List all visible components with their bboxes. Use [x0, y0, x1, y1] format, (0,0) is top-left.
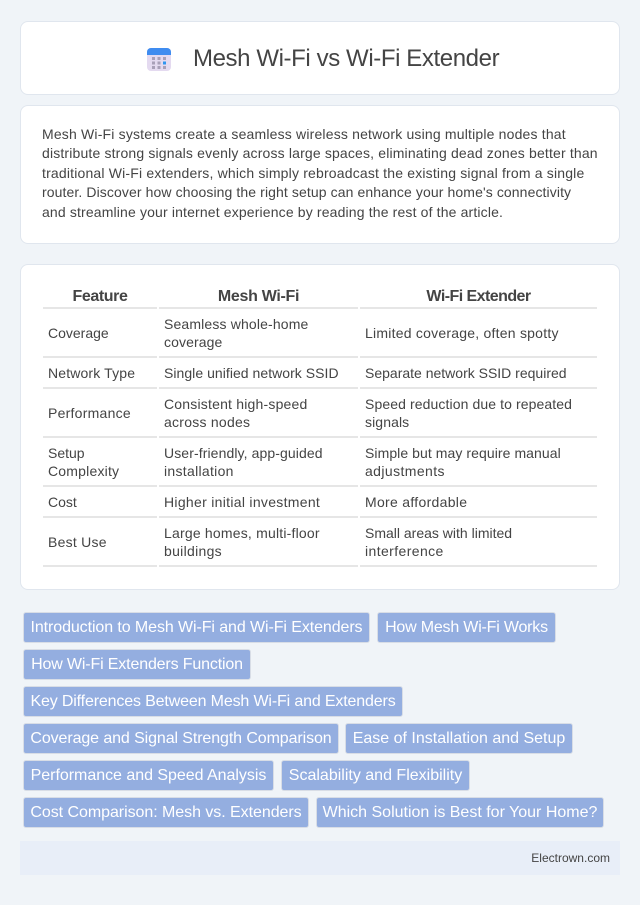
row: network type [48, 365, 567, 381]
row: performance [48, 396, 572, 430]
tag [23, 686, 403, 717]
tag: Key Differences Between Mesh Wi-Fi and Extenders [30, 693, 396, 710]
row: network type: Separate network SSID required [365, 365, 567, 381]
row: cost: Higher initial investment [164, 494, 320, 510]
row: performance: Speed reduction due to repeated [365, 396, 572, 412]
table header: Wi-Fi Extender [426, 288, 531, 305]
row: coverage [48, 316, 559, 350]
tag: Which Solution is Best for Your Home? [323, 804, 597, 821]
text block: intro paragraph: distribute strong signals evenly across large spaces, eliminating dead zones better than [42, 145, 598, 161]
tag [345, 723, 573, 754]
row: performance: Performance [48, 405, 131, 421]
row: coverage: coverage [164, 334, 222, 350]
footer credit: Electrown.com [531, 851, 610, 865]
text block: intro paragraph: router. Discover how choosing the right setup can enhance your home's connectivity [42, 184, 571, 200]
row: setup complexity: Simple but may require manual [365, 445, 561, 461]
row: coverage: Limited coverage, often spotty [365, 325, 559, 341]
row: network type: Network Type [48, 365, 135, 381]
text block: intro paragraph [42, 126, 598, 220]
icon: calendar grid [147, 48, 171, 71]
row: performance: Consistent high-speed [164, 396, 308, 412]
row: setup complexity: installation [164, 463, 234, 479]
row: best use: Small areas with limited [365, 525, 512, 541]
tag: Cost Comparison: Mesh vs. Extenders [30, 804, 302, 821]
tag [23, 760, 274, 791]
text block: intro paragraph: traditional Wi-Fi extenders, which simply rebroadcast the existing signal from a single [42, 165, 584, 181]
tag [281, 760, 470, 791]
tag [377, 612, 556, 643]
tag [23, 723, 339, 754]
row: coverage: Coverage [48, 325, 109, 341]
table header: Mesh Wi-Fi [218, 288, 299, 305]
row: setup complexity: adjustments [365, 463, 445, 479]
tag: Ease of Installation and Setup [353, 730, 565, 747]
row: best use: interference [365, 543, 444, 559]
tag: How Mesh Wi-Fi Works [385, 619, 548, 636]
heading: Mesh Wi-Fi vs Wi-Fi Extender [193, 45, 499, 72]
tag: Performance and Speed Analysis [31, 767, 266, 784]
row: best use: Best Use [48, 534, 107, 550]
row: cost: Cost [48, 494, 77, 510]
row: cost [48, 494, 467, 510]
row: setup complexity: User-friendly, app-guided [164, 445, 323, 461]
footer [20, 841, 620, 875]
row: setup complexity: Complexity [48, 463, 119, 479]
row: setup complexity [48, 445, 561, 479]
table header [72, 288, 531, 305]
row: best use: buildings [164, 543, 222, 559]
text block: intro paragraph: Mesh Wi-Fi systems create a seamless wireless network using multiple nodes that [42, 126, 566, 142]
row: best use: Large homes, multi-floor [164, 525, 320, 541]
tag [23, 797, 309, 828]
panel: topic tags [23, 612, 604, 828]
row: cost: More affordable [365, 494, 467, 510]
row: best use [48, 525, 512, 559]
table header: Feature [72, 288, 128, 305]
row: performance: across nodes [164, 414, 250, 430]
tag: Scalability and Flexibility [289, 767, 462, 784]
tag [23, 612, 370, 643]
row: coverage: Seamless whole-home [164, 316, 308, 332]
panel: introduction [20, 105, 620, 244]
row: setup complexity: Setup [48, 445, 85, 461]
panel: comparison table [20, 264, 620, 590]
text block: intro paragraph: and streamline your internet experience by reading the rest of the article. [42, 204, 503, 220]
panel: title [20, 21, 620, 95]
row: performance: signals [365, 414, 409, 430]
row: network type: Single unified network SSID [164, 365, 339, 381]
tag: Coverage and Signal Strength Comparison [30, 730, 332, 747]
tag [316, 797, 604, 828]
tag [23, 649, 251, 680]
tag: How Wi-Fi Extenders Function [31, 656, 243, 673]
tag: Introduction to Mesh Wi-Fi and Wi-Fi Extenders [30, 619, 362, 636]
